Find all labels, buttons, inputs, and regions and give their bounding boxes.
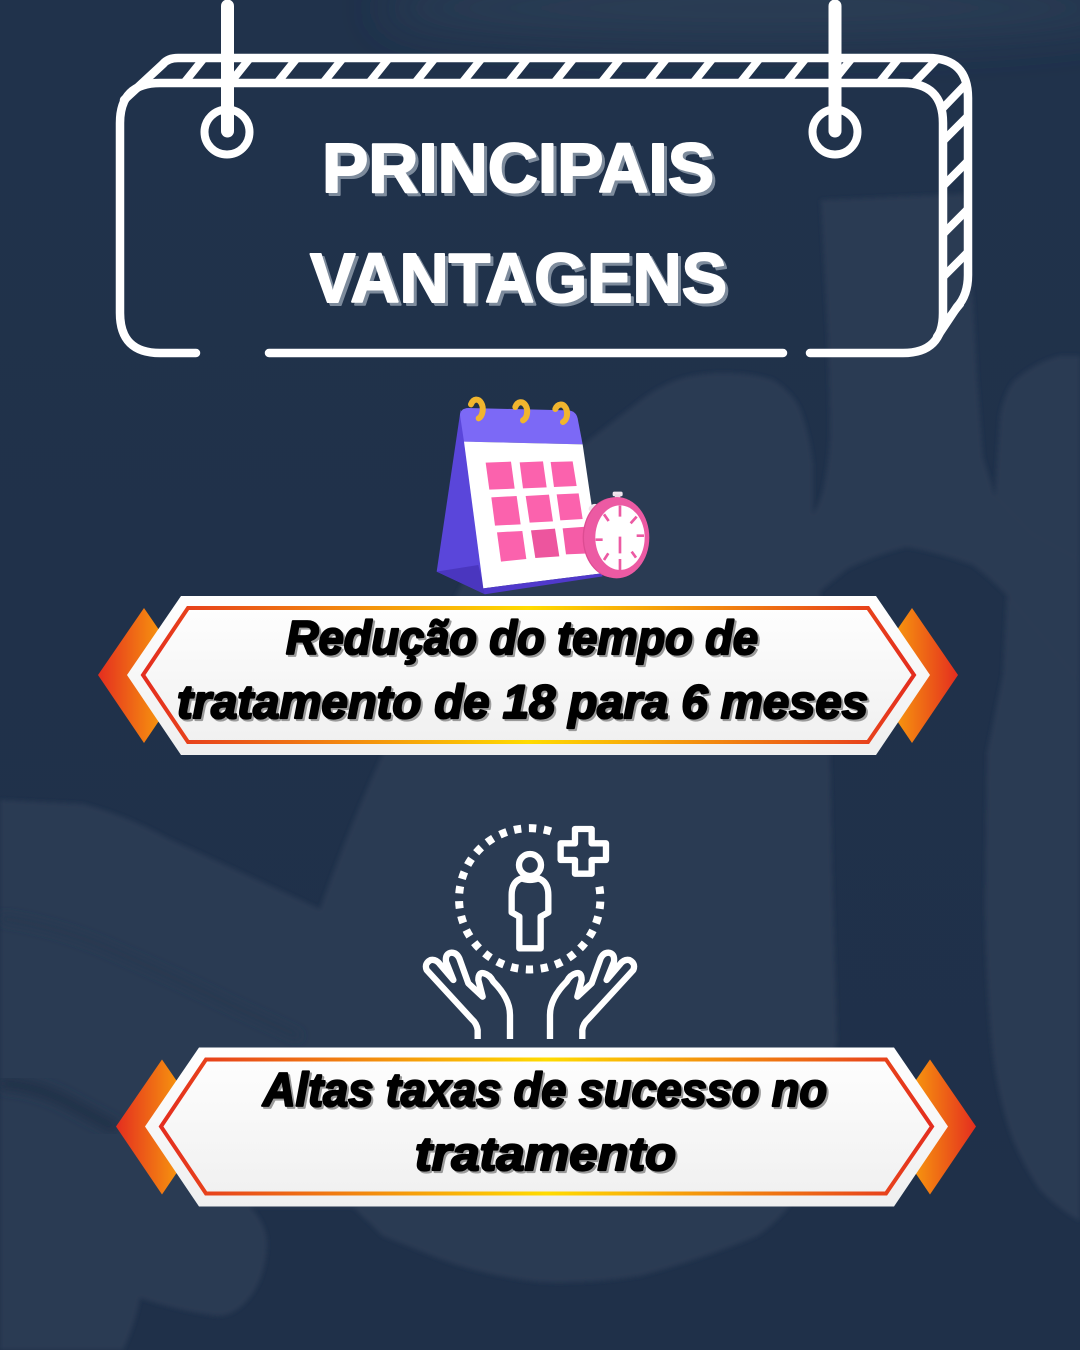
banner 1 text: tratamento de 18 para 6 meses (177, 675, 868, 728)
banner gradient border (143, 608, 914, 742)
left hanger (204, 6, 250, 154)
right chevron (884, 1060, 976, 1194)
banner 1 text: Redução do tempo de (286, 611, 758, 664)
left chevron (116, 1060, 208, 1194)
stopwatch (583, 492, 649, 578)
banner 2 text: tratamento (415, 1127, 676, 1180)
banner body (145, 1048, 948, 1206)
left hand (426, 953, 510, 1039)
sign top and side hatching (184, 58, 968, 325)
calendar header (460, 408, 583, 444)
medical cross (561, 829, 606, 874)
calendar stand (437, 410, 493, 594)
icon: calendar with stopwatch (437, 400, 649, 594)
banner 2 text (262, 1063, 827, 1180)
calendar page (464, 442, 602, 588)
title: PRINCIPAIS (322, 129, 714, 207)
icon: person held by hands with medical cross (426, 828, 634, 1039)
banner body (127, 596, 930, 755)
left chevron (98, 608, 190, 743)
person (512, 854, 548, 948)
title (310, 129, 727, 317)
banner 1 (98, 596, 958, 755)
right hanger (812, 6, 858, 154)
calendar day squares (486, 461, 590, 562)
title: VANTAGENS (310, 239, 727, 317)
dotted ring (459, 828, 600, 969)
banner 2 (116, 1048, 976, 1206)
right hand (550, 953, 634, 1039)
banner gradient border (161, 1060, 932, 1194)
banner 2 text: Altas taxas de sucesso no (262, 1063, 827, 1116)
banner 1 text (177, 611, 868, 728)
right chevron (866, 608, 958, 743)
calendar rings (471, 400, 567, 422)
hanging sign frame (120, 58, 968, 353)
sign depth outline (124, 58, 968, 337)
sign front panel outline (120, 83, 943, 353)
